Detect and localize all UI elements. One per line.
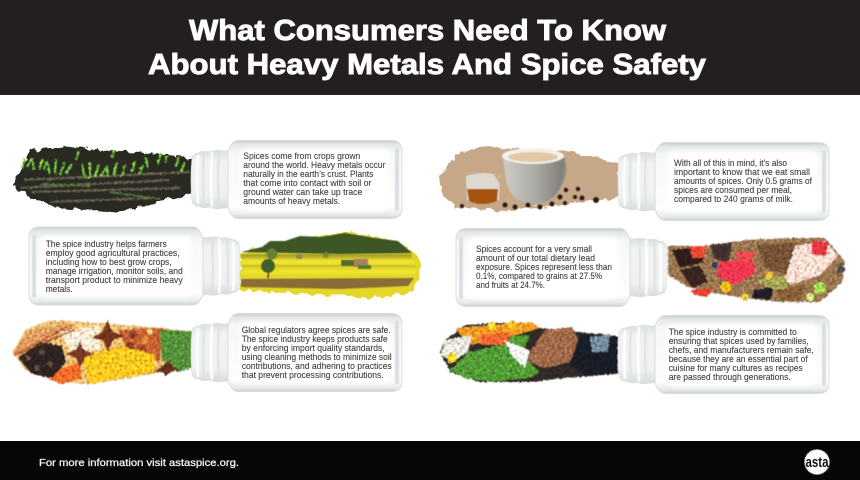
title: About Heavy Metals And Spice Safety: [148, 49, 706, 81]
text: commitment: [669, 327, 814, 382]
bottle 4: [618, 142, 829, 220]
text: farming practices: [46, 239, 183, 294]
text: dietary lead: 0.1%, compared to grains at 27.5%: [476, 271, 602, 281]
image: yellow farm field: [240, 232, 421, 298]
title: What Consumers Need To Know: [189, 15, 666, 47]
text: regulators: using cleaning methods to minimize soil: [242, 352, 392, 362]
text: farming practices: metals.: [46, 284, 73, 294]
bottle 2: [29, 227, 240, 305]
text: farming practices: transport product to minimize heavy: [46, 275, 183, 285]
text: crops: [243, 151, 385, 206]
text: small amounts: With all of this in mind, it’s also: [674, 158, 787, 168]
text: regulators: The spice industry keeps products safe: [242, 334, 388, 344]
text: regulators: by enforcing import quality standards,: [242, 343, 385, 353]
image: coffee cup and honey: [440, 146, 618, 210]
image: assorted foods: [668, 238, 846, 302]
footer text: For more information visit astaspice.org.: [39, 457, 239, 469]
image: chef chopping herbs: [440, 321, 618, 382]
text: small amounts: spices are consumed per meal,: [674, 185, 792, 195]
header band: [0, 0, 860, 95]
text: commitment: chefs, and manufacturers remain safe,: [669, 345, 814, 355]
logo: asta: asta: [806, 454, 829, 471]
text: farming practices: employ good agricultural practices,: [46, 248, 180, 258]
bottle 1: [191, 140, 402, 218]
text: commitment: are passed through generations.: [669, 372, 791, 382]
text: regulators: that prevent processing contributions.: [242, 370, 384, 380]
text: crops: amounts of heavy metals.: [243, 196, 340, 206]
text: farming practices: including how to best grow crops,: [46, 257, 172, 267]
text: dietary lead: Spices account for a very small: [476, 244, 592, 254]
text: commitment: The spice industry is committed to: [669, 327, 797, 337]
text: crops: that come into contact with soil or: [243, 178, 371, 188]
text: regulators: [242, 325, 392, 380]
title: [148, 15, 706, 81]
image: soil with seedlings: [13, 147, 194, 212]
text: regulators: Global regulators agree spices are safe.: [242, 325, 391, 335]
text: crops: Spices come from crops grown: [243, 151, 360, 161]
text: crops: around the world. Heavy metals occur: [243, 160, 385, 170]
text: small amounts: [674, 158, 812, 204]
text: small amounts: amounts of spices. Only 0.5 grams of: [674, 176, 812, 186]
text: regulators: contributions, and adhering to practices: [242, 361, 392, 371]
text: crops: naturally in the earth’s crust. Plants: [243, 169, 374, 179]
text: commitment: because they are an essential part of: [669, 354, 808, 364]
text: crops: ground water can take up trace: [243, 187, 362, 197]
text: commitment: ensuring that spices used by families,: [669, 336, 809, 346]
image: pile of spices: [12, 320, 193, 384]
footer band: [0, 441, 860, 480]
bottle 6: [618, 316, 829, 394]
text: dietary lead: exposure. Spices represent less than: [476, 262, 612, 272]
text: small amounts: compared to 240 grams of milk.: [674, 194, 793, 204]
text: farming practices: manage irrigation, monitor soils, and: [46, 266, 183, 276]
logo: asta: [804, 450, 830, 474]
text: dietary lead: [476, 244, 612, 290]
text: commitment: cuisine for many cultures as recipes: [669, 363, 803, 373]
text: farming practices: The spice industry helps farmers: [46, 239, 167, 249]
bottle 3: [191, 314, 402, 392]
text: dietary lead: and fruits at 24.7%.: [476, 280, 545, 290]
text: dietary lead: amount of our total dietary lead: [476, 253, 595, 263]
text: small amounts: important to know that we eat small: [674, 167, 810, 177]
bottle 5: [456, 228, 667, 306]
